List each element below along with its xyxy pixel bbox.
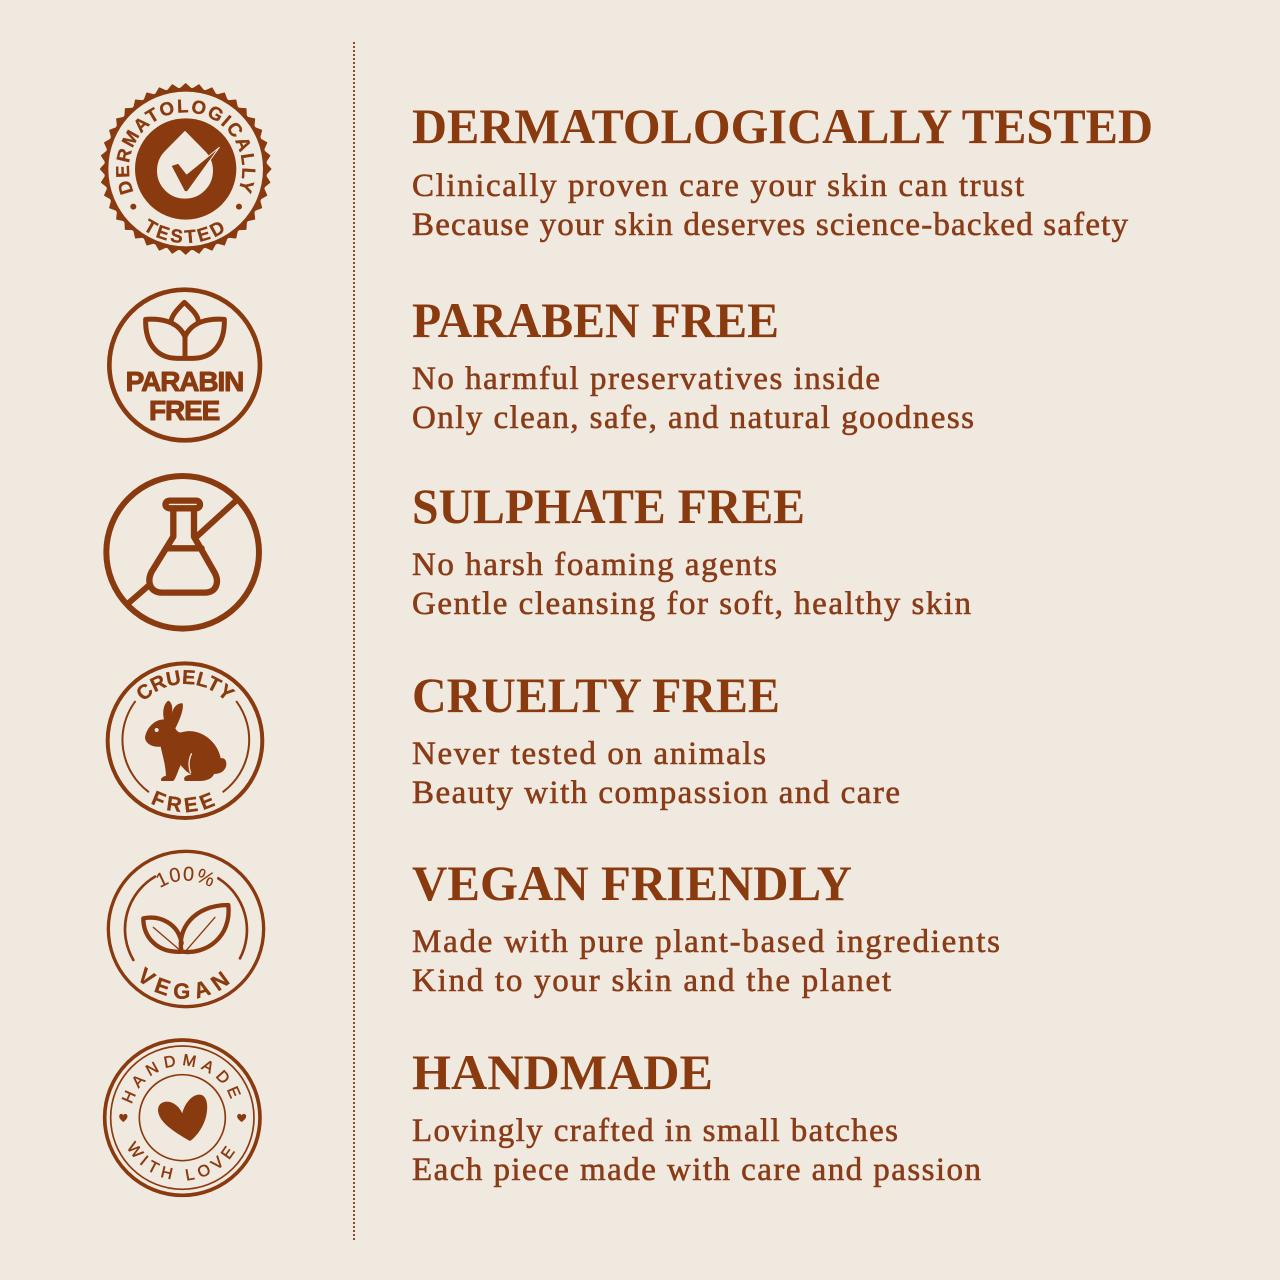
text block: dermatologically tested: Clinically proven care your skin can trust — [412, 168, 1024, 204]
icon: handmade with love stamp: WITH LOVE — [128, 1140, 235, 1181]
text block: handmade — [412, 1113, 981, 1188]
icon: cruelty free rabbit badge: FREE — [151, 790, 216, 812]
icon: 100% vegan leaf badge: VEGAN — [140, 966, 230, 999]
panel: handmade — [102, 1038, 981, 1198]
icon: parabin free lotus badge: FREE — [149, 395, 220, 426]
icon: dermatologically tested seal — [100, 83, 272, 255]
icon: handmade with love stamp: HANDMADE — [122, 1054, 241, 1104]
text block: sulphate free: No harsh foaming agents — [412, 547, 777, 583]
panel: paraben free — [109, 290, 974, 440]
heading: vegan friendly: VEGAN FRIENDLY — [412, 855, 852, 911]
text block: paraben free — [412, 361, 974, 436]
icon: crossed-out flask — [106, 476, 259, 629]
panel: vegan friendly — [106, 850, 1000, 1008]
panel: sulphate free — [106, 476, 971, 629]
text block: cruelty free: Beauty with compassion and care — [412, 775, 900, 811]
icon: cruelty free rabbit badge: CRUELTY — [137, 670, 236, 699]
text block: vegan friendly — [412, 924, 1000, 999]
text block: cruelty free: Never tested on animals — [412, 736, 766, 772]
icon: cruelty free rabbit badge — [106, 661, 264, 820]
icon: 100% vegan leaf badge: 100% — [156, 866, 214, 888]
panel: dermatologically tested — [100, 83, 1153, 255]
text block: vegan friendly: Kind to your skin and the planet — [412, 963, 891, 999]
text block: paraben free: No harmful preservatives inside — [412, 361, 880, 397]
heading: sulphate free: SULPHATE FREE — [412, 478, 805, 534]
text block: cruelty free — [412, 736, 900, 811]
icon: 100% vegan leaf badge — [106, 850, 266, 1008]
text block: dermatologically tested: Because your skin deserves science-backed safety — [412, 207, 1128, 243]
heading: cruelty free: CRUELTY FREE — [412, 667, 780, 723]
text block: handmade: Each piece made with care and passion — [412, 1152, 981, 1188]
icon: parabin free lotus badge — [109, 290, 260, 440]
icon: dermatologically tested seal: TESTED — [146, 218, 224, 244]
heading: dermatologically tested: DERMATOLOGICALLY TESTED — [412, 98, 1153, 154]
icon: dermatologically tested seal: DERMATOLOGICALLY — [116, 100, 256, 195]
icon: parabin free lotus badge: PARABIN — [126, 366, 244, 397]
text block: sulphate free — [412, 547, 971, 622]
heading: paraben free: PARABEN FREE — [412, 292, 779, 348]
text block: dermatologically tested — [412, 168, 1128, 243]
text block: sulphate free: Gentle cleansing for soft, healthy skin — [412, 586, 971, 622]
text block: paraben free: Only clean, safe, and natural goodness — [412, 400, 974, 436]
text block: vegan friendly: Made with pure plant-based ingredients — [412, 924, 1000, 960]
heading: handmade: HANDMADE — [412, 1044, 713, 1100]
panel: cruelty free — [106, 661, 900, 820]
text block: handmade: Lovingly crafted in small batches — [412, 1113, 898, 1149]
icon: handmade with love stamp — [102, 1038, 262, 1198]
